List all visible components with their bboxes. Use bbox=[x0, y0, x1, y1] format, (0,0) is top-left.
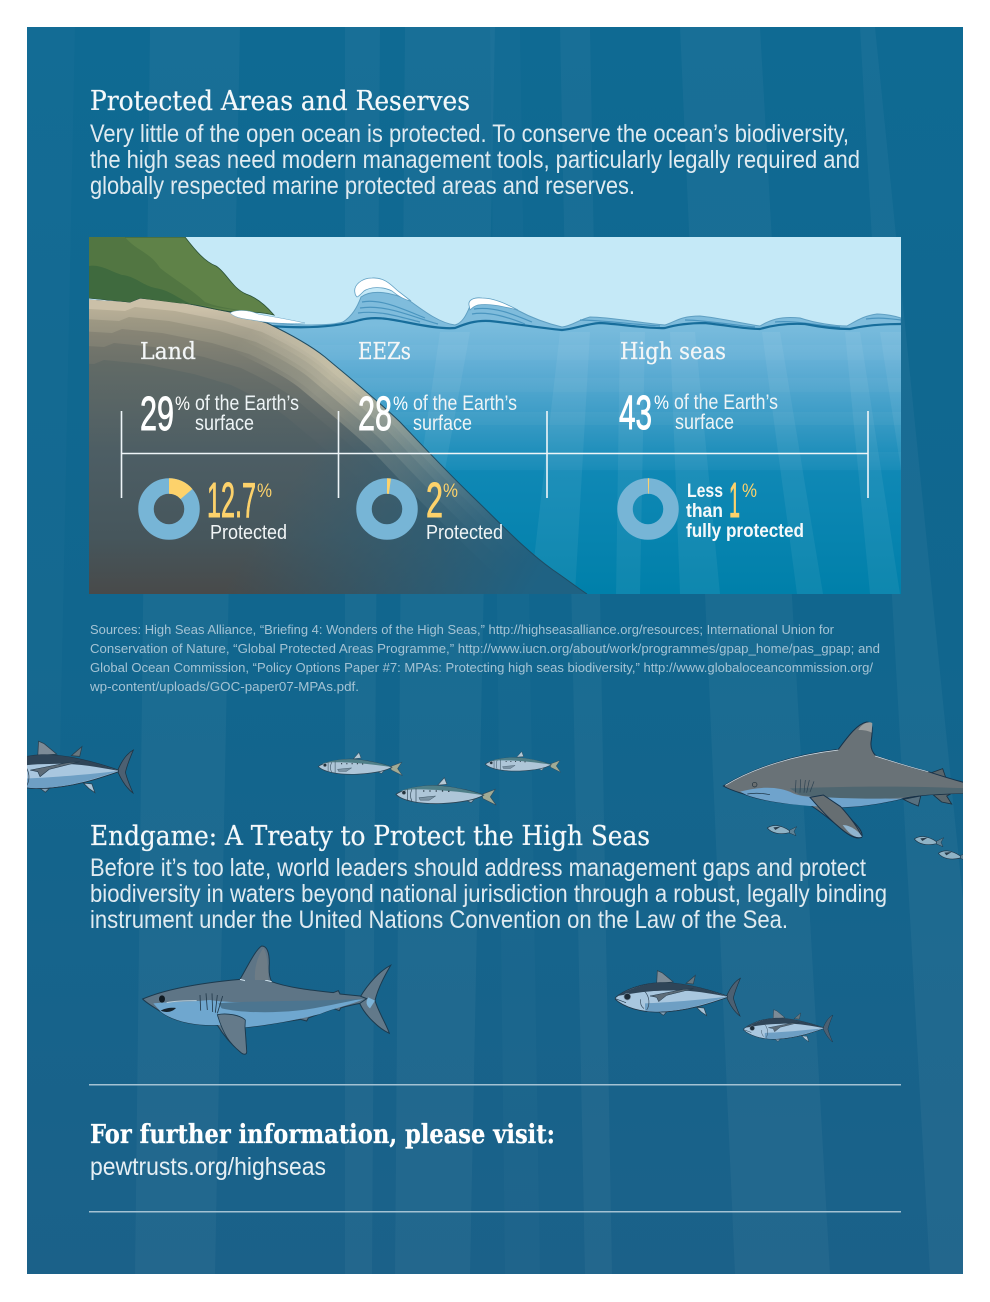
divider line top bbox=[89, 1084, 901, 1086]
stat: 29 percent of the Earth's surface bbox=[140, 388, 299, 441]
icon: tuna at left edge bbox=[27, 740, 134, 794]
heading: Endgame: Endgame: A Treaty to Protect the High Seas bbox=[90, 821, 650, 852]
icon: oceanic whitetip shark with pilot fish bbox=[723, 722, 970, 861]
heading: Protected Areas and Reserves: Protected Areas and Reserves bbox=[90, 86, 470, 117]
stat: 43 percent of the Earth's surface bbox=[619, 387, 778, 440]
green hillside bbox=[89, 237, 274, 315]
stat: less than 1 percent fully protected: 1 bbox=[729, 474, 740, 528]
stat: less than 1 percent fully protected: Less bbox=[687, 480, 723, 502]
sky bbox=[89, 237, 901, 326]
surf at shore bbox=[230, 310, 305, 323]
endgame text block: instrument under the United Nations Convention on the Law of the Sea. bbox=[90, 906, 788, 934]
heading: further information: For further information, please visit: bbox=[90, 1120, 555, 1150]
endgame text block: Before it’s too late, world leaders should address management gaps and protect bbox=[90, 854, 866, 882]
stat: 29 percent of the Earth's surface: surface bbox=[195, 412, 254, 435]
stat: 12.7 percent protected: % bbox=[257, 481, 272, 502]
call to action bbox=[90, 1120, 555, 1181]
stat: less than 1 percent fully protected: % bbox=[742, 481, 757, 502]
stat: less than 1 percent fully protected: fully protected bbox=[686, 520, 804, 542]
stat: 28 percent of the Earth's surface: surface bbox=[413, 412, 472, 435]
stat: 12.7 percent protected bbox=[207, 474, 287, 544]
column: High seas bbox=[619, 339, 804, 542]
column: EEZs bbox=[358, 339, 517, 544]
link text: pewtrusts.org/highseas bbox=[90, 1153, 326, 1181]
stat: 29 percent of the Earth's surface: of the Earth’s bbox=[195, 392, 299, 415]
sources text bbox=[89, 623, 880, 694]
stat: 12.7 percent protected: Protected bbox=[210, 521, 287, 544]
dark waterline bbox=[270, 318, 901, 330]
sources text: Sources: High Seas Alliance, “Briefing 4: Wonders of the High Seas,” http://highseasalliance.org/resources; International Union for bbox=[90, 623, 834, 637]
donut: 2 percent protected bbox=[364, 486, 410, 532]
panel: ocean cross-section scene bbox=[89, 237, 901, 594]
stat: less than 1 percent fully protected: than bbox=[686, 500, 723, 522]
wave crests bbox=[355, 278, 518, 310]
stat: less than 1 percent fully protected bbox=[686, 474, 804, 542]
stat: 28 percent of the Earth's surface: % bbox=[393, 394, 408, 415]
sources text: Conservation of Nature, “Global Protected Areas Programme,” http://www.iucn.org/about/work/programmes/gpap_home/pas_gpap; and bbox=[90, 642, 880, 656]
wave body above waterline bbox=[267, 292, 901, 329]
label: High seas: High seas bbox=[620, 339, 726, 365]
icon: sardine school bbox=[318, 752, 561, 805]
stat: 29 percent of the Earth's surface: 29 bbox=[140, 388, 174, 441]
column: Land bbox=[140, 339, 299, 544]
donut: less than 1 percent protected bbox=[625, 486, 671, 532]
stat: 43 percent of the Earth's surface: surface bbox=[675, 411, 734, 434]
label: Land: Land bbox=[140, 339, 196, 365]
stat: 2 percent protected bbox=[426, 474, 503, 544]
stat: 29 percent of the Earth's surface: % bbox=[175, 394, 190, 415]
scale bar with ticks bbox=[122, 411, 868, 498]
water bbox=[283, 325, 901, 594]
land strata bbox=[89, 298, 588, 594]
stat: 2 percent protected: Protected bbox=[426, 521, 503, 544]
label: EEZs: EEZs bbox=[358, 339, 411, 365]
stat: 28 percent of the Earth's surface bbox=[358, 388, 517, 441]
intro text block: the high seas need modern management tools, particularly legally required and bbox=[90, 146, 860, 174]
stat: 2 percent protected: 2 bbox=[426, 474, 443, 528]
icon: mako shark bbox=[143, 946, 391, 1054]
intro text block bbox=[90, 120, 860, 200]
stat: 28 percent of the Earth's surface: of the Earth’s bbox=[413, 392, 517, 415]
sources text: Global Ocean Commission, “Policy Options Paper #7: MPAs: Protecting high seas biodiversity,” http://www.globaloceancommission.org/ bbox=[90, 661, 874, 675]
donut: 12.7 percent protected bbox=[146, 486, 192, 532]
endgame text block: biodiversity in waters beyond national jurisdiction through a robust, legally binding bbox=[90, 880, 887, 908]
stat: 43 percent of the Earth's surface: 43 bbox=[619, 387, 652, 440]
stat: 12.7 percent protected: 12.7 bbox=[207, 474, 256, 528]
stat: 43 percent of the Earth's surface: of the Earth’s bbox=[674, 391, 778, 414]
divider line bottom bbox=[89, 1211, 901, 1212]
endgame text block bbox=[90, 854, 887, 934]
intro text block: globally respected marine protected areas and reserves. bbox=[90, 172, 635, 200]
stat: 28 percent of the Earth's surface: 28 bbox=[358, 388, 392, 441]
icon: tuna pair bbox=[615, 971, 833, 1042]
intro text block: Very little of the open ocean is protected. To conserve the ocean’s biodiversity, bbox=[90, 120, 849, 148]
sources text: wp-content/uploads/GOC-paper07-MPAs.pdf. bbox=[89, 680, 359, 694]
stat: 2 percent protected: % bbox=[443, 481, 458, 502]
stat: 43 percent of the Earth's surface: % bbox=[654, 393, 669, 414]
